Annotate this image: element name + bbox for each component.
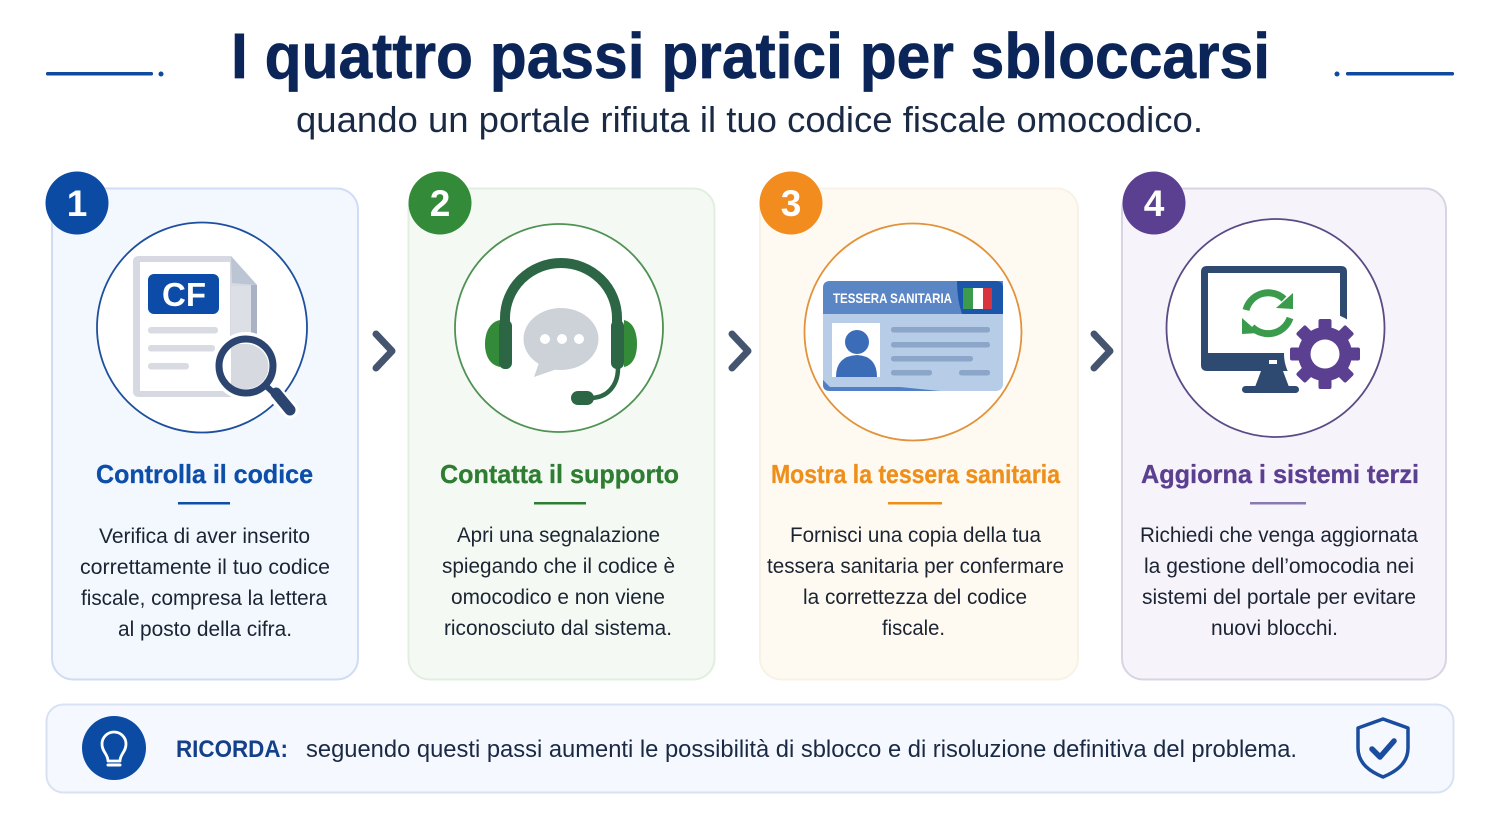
step 1 badge [46, 172, 108, 234]
step 2 badge: 2 [430, 183, 450, 224]
step 3 badge [760, 172, 822, 234]
text block 3: la correttezza del codice [803, 585, 1027, 609]
text block 1: fiscale, compresa la lettera [81, 586, 327, 610]
icon: health card [804, 224, 1022, 440]
heading 1: Controlla il codice [96, 459, 313, 489]
icon: document with magnifier [97, 222, 307, 432]
panel: step 3 [760, 172, 1078, 680]
arrow 1 [376, 334, 392, 368]
text block 4: Richiedi che venga aggiornata [1140, 523, 1418, 547]
icon: health card: TESSERA SANITARIA [833, 290, 952, 306]
panel: step 4 [1122, 172, 1446, 680]
step 4 badge [1122, 172, 1186, 234]
step 4 badge: 4 [1144, 183, 1165, 224]
text block 3 [767, 523, 1064, 640]
text block 3: tessera sanitaria per confermare [767, 554, 1064, 578]
title: I quattro passi pratici per sbloccarsi [231, 20, 1270, 92]
text block 1 [80, 524, 330, 641]
heading 4: Aggiorna i sistemi terzi [1141, 459, 1419, 489]
panel: step 1 [46, 172, 358, 680]
icon: headset with chat bubble [455, 224, 663, 432]
text block 4: nuovi blocchi. [1211, 616, 1338, 640]
step 3 badge: 3 [781, 183, 801, 224]
reminder text: seguendo questi passi aumenti le possibilità di sblocco e di risoluzione definitiva del problema. [306, 736, 1297, 763]
text block 1: al posto della cifra. [118, 617, 292, 641]
text block 4 [1140, 523, 1418, 640]
text block 3: Fornisci una copia della tua [790, 523, 1041, 547]
text block 4: sistemi del portale per evitare [1142, 585, 1416, 609]
step 1 badge: 1 [67, 183, 87, 224]
arrow 2 [732, 334, 748, 368]
icon: shield check [1358, 719, 1408, 777]
text block 2 [442, 523, 675, 640]
reminder label: RICORDA: [176, 736, 288, 763]
heading 2: Contatta il supporto [440, 459, 679, 489]
text block 2: omocodico e non viene [451, 585, 665, 609]
text block 2: riconosciuto dal sistema. [444, 616, 672, 640]
text block 4: la gestione dell’omocodia nei [1144, 554, 1414, 578]
text block 2: Apri una segnalazione [457, 523, 660, 547]
arrow 3 [1094, 334, 1110, 368]
text block 1: correttamente il tuo codice [80, 555, 330, 579]
icon: light bulb [82, 716, 146, 780]
panel: step 2 [408, 172, 714, 680]
icon: monitor with sync and gear [1166, 219, 1384, 437]
icon: document with magnifier: CF [162, 276, 206, 313]
text block 3: fiscale. [882, 616, 945, 640]
text block 2: spiegando che il codice è [442, 554, 675, 578]
callout: reminder [46, 704, 1454, 792]
text block 1: Verifica di aver inserito [99, 524, 310, 548]
step 2 badge [408, 172, 472, 234]
subtitle: quando un portale rifiuta il tuo codice fiscale omocodico. [296, 99, 1203, 140]
heading 3: Mostra la tessera sanitaria [771, 459, 1060, 489]
